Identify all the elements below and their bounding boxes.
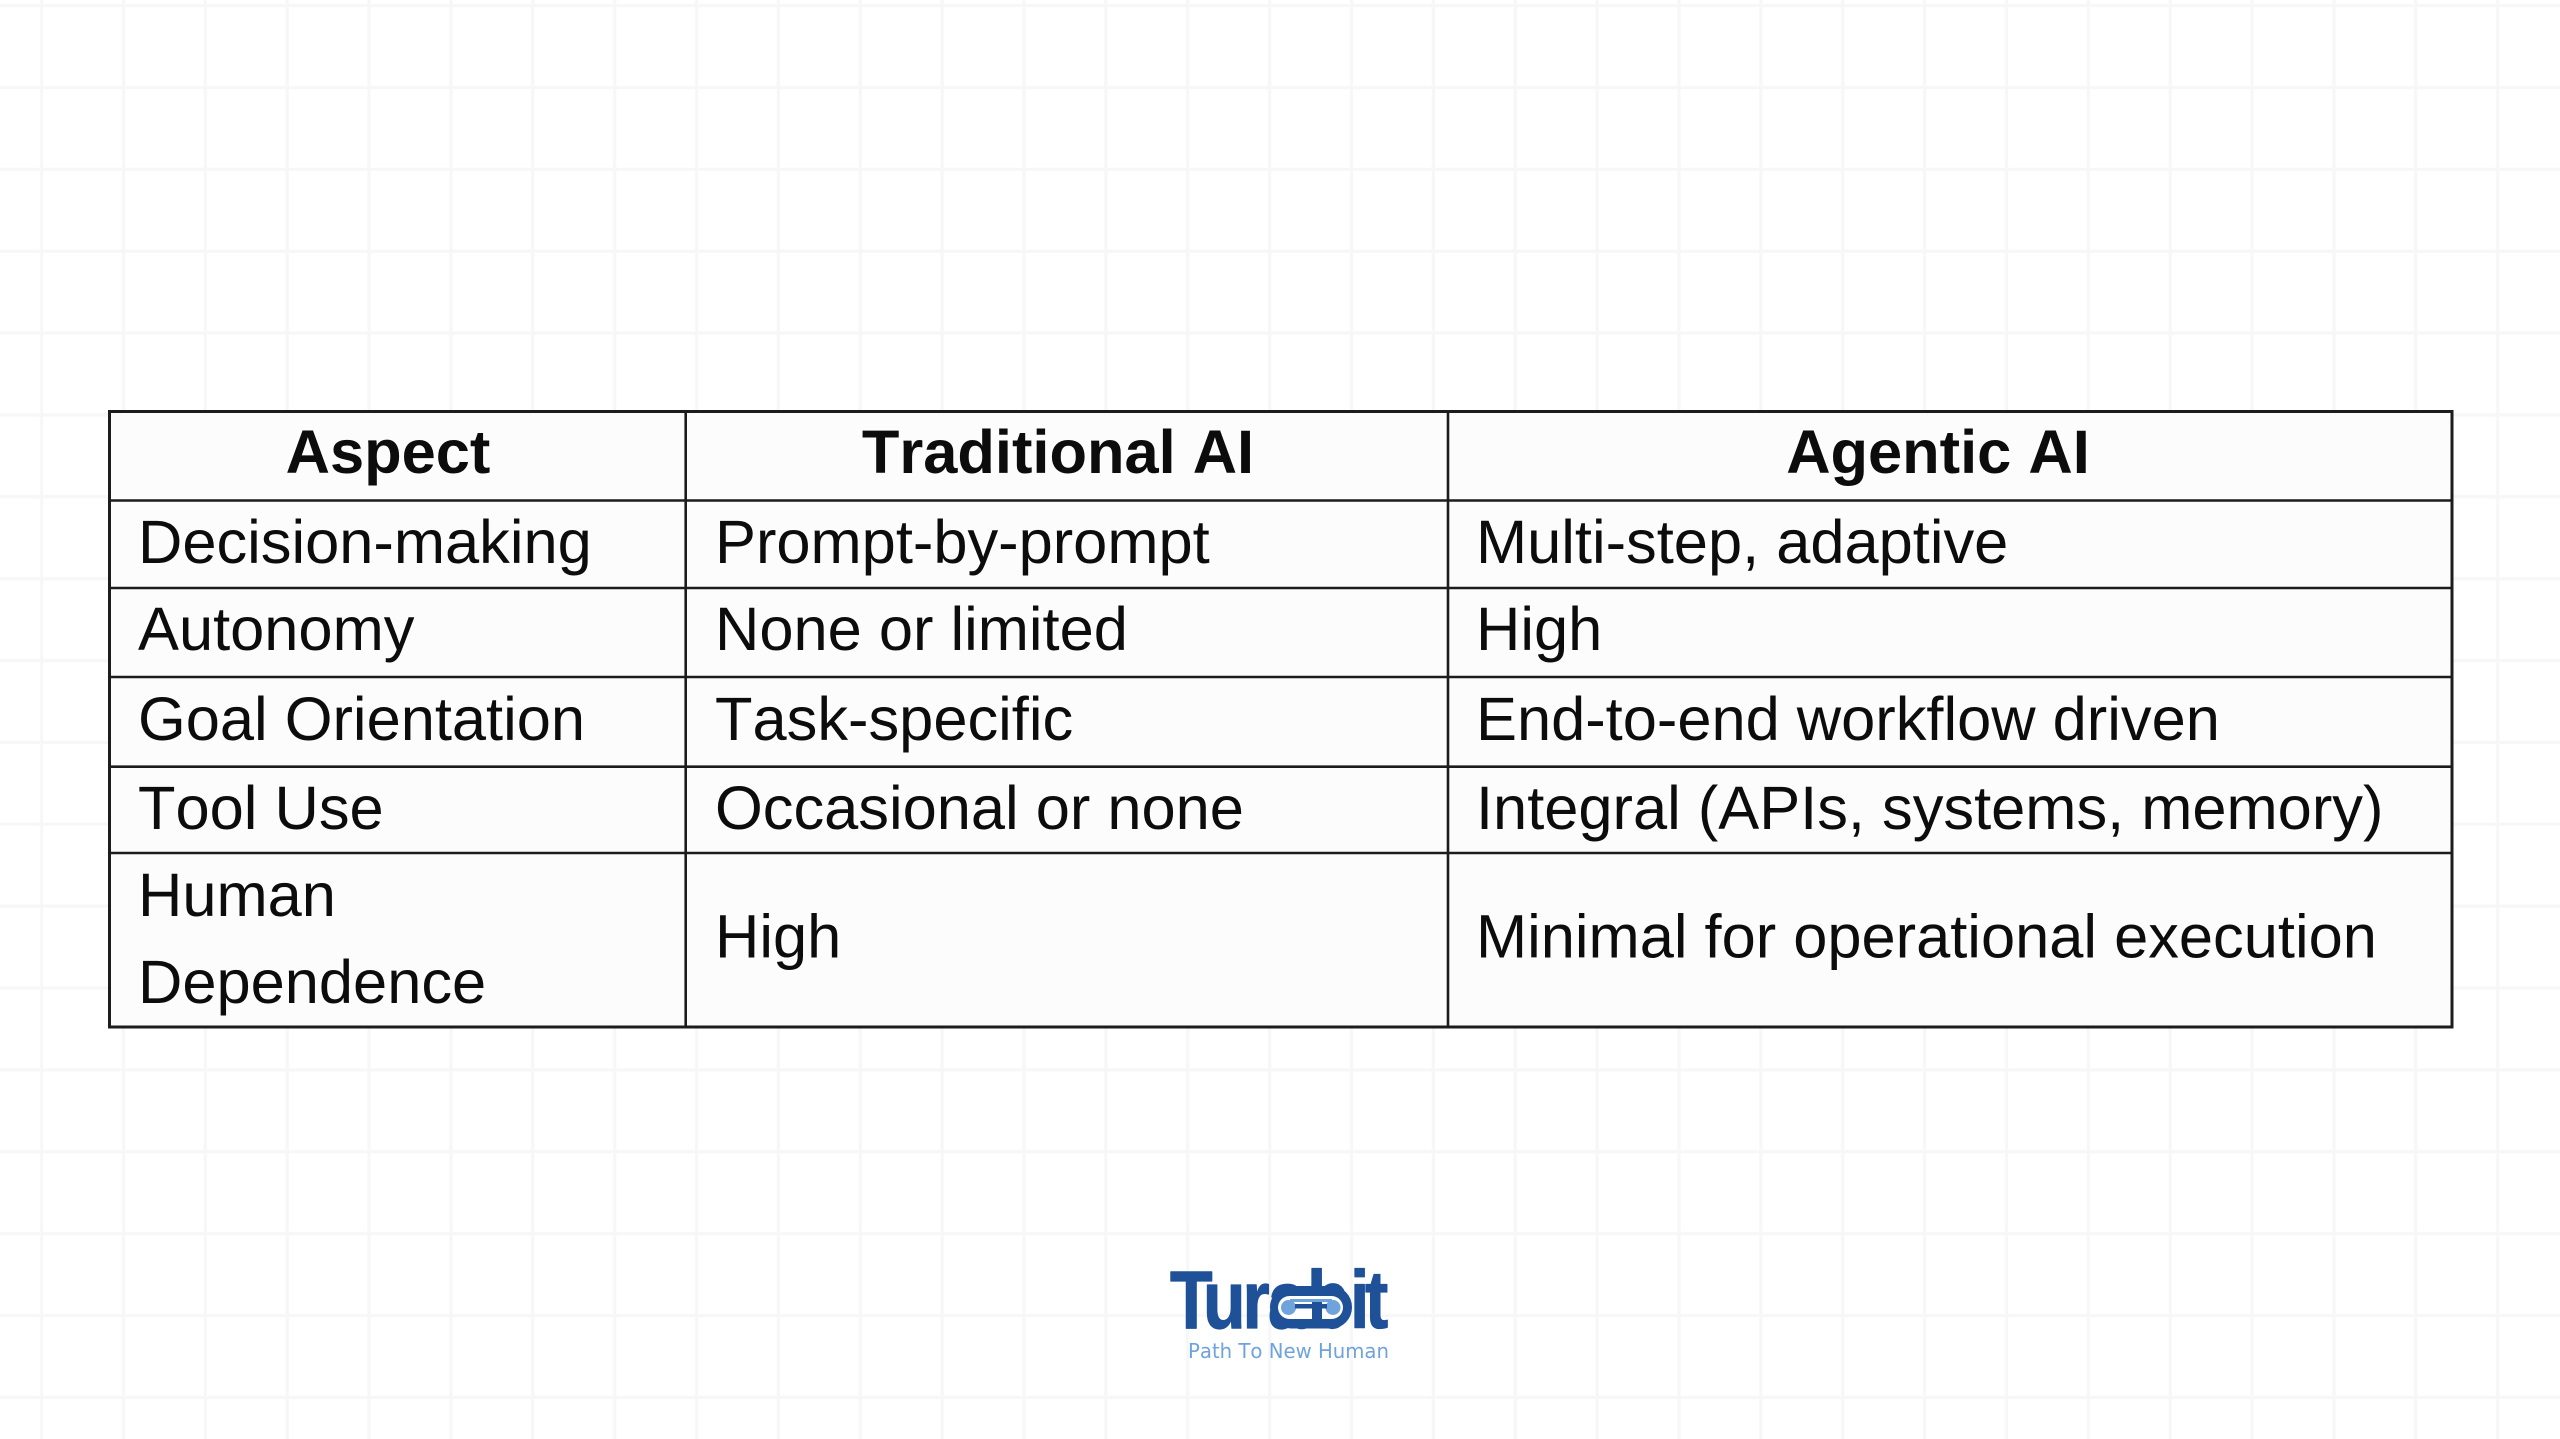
row: Human Dependence: [138, 861, 2377, 1017]
header: Aspect: Aspect: [286, 418, 490, 487]
row: Decision-making: Multi-step, adaptive: [1476, 508, 2008, 577]
row: Tool Use: Occasional or none: [715, 774, 1244, 843]
row: Goal Orientation: Goal Orientation: [138, 685, 585, 754]
row: Decision-making: Prompt-by-prompt: [715, 508, 1210, 577]
row: Autonomy: None or limited: [715, 595, 1128, 664]
row: Goal Orientation: Task-specific: [715, 685, 1073, 754]
table background: [109, 411, 2452, 1027]
row: Decision-making: [138, 508, 2008, 577]
logo wordmark: Turabit: [1170, 1255, 1388, 1346]
header row: [286, 418, 2090, 487]
header: Agentic AI: Agentic AI: [1786, 418, 2090, 487]
row: Goal Orientation: End-to-end workflow driven: [1476, 685, 2220, 754]
row: Tool Use: Integral (APIs, systems, memory): [1476, 774, 2383, 843]
logo: Turabit: [1170, 1255, 1389, 1363]
logo tagline: Path To New Human: [1188, 1339, 1389, 1363]
row: Goal Orientation: [138, 685, 2220, 754]
icon: chain link joining a and b: [1270, 1286, 1352, 1328]
row: Human Dependence: Minimal for operational execution: [1476, 902, 2377, 972]
row: Tool Use: [138, 774, 2383, 843]
row: Human Dependence: Human: [138, 861, 336, 930]
row: Decision-making: Decision-making: [138, 508, 592, 577]
row: Human Dependence: High: [715, 902, 841, 972]
row: Autonomy: [138, 595, 1602, 664]
table grid lines: [109, 411, 2452, 1027]
row: Autonomy: Autonomy: [138, 595, 415, 664]
comparison table: [109, 411, 2452, 1027]
row: Autonomy: High: [1476, 595, 1602, 664]
row: Tool Use: Tool Use: [138, 774, 384, 843]
header: Traditional AI: Traditional AI: [862, 418, 1254, 487]
row: Human Dependence: Dependence: [138, 948, 486, 1017]
